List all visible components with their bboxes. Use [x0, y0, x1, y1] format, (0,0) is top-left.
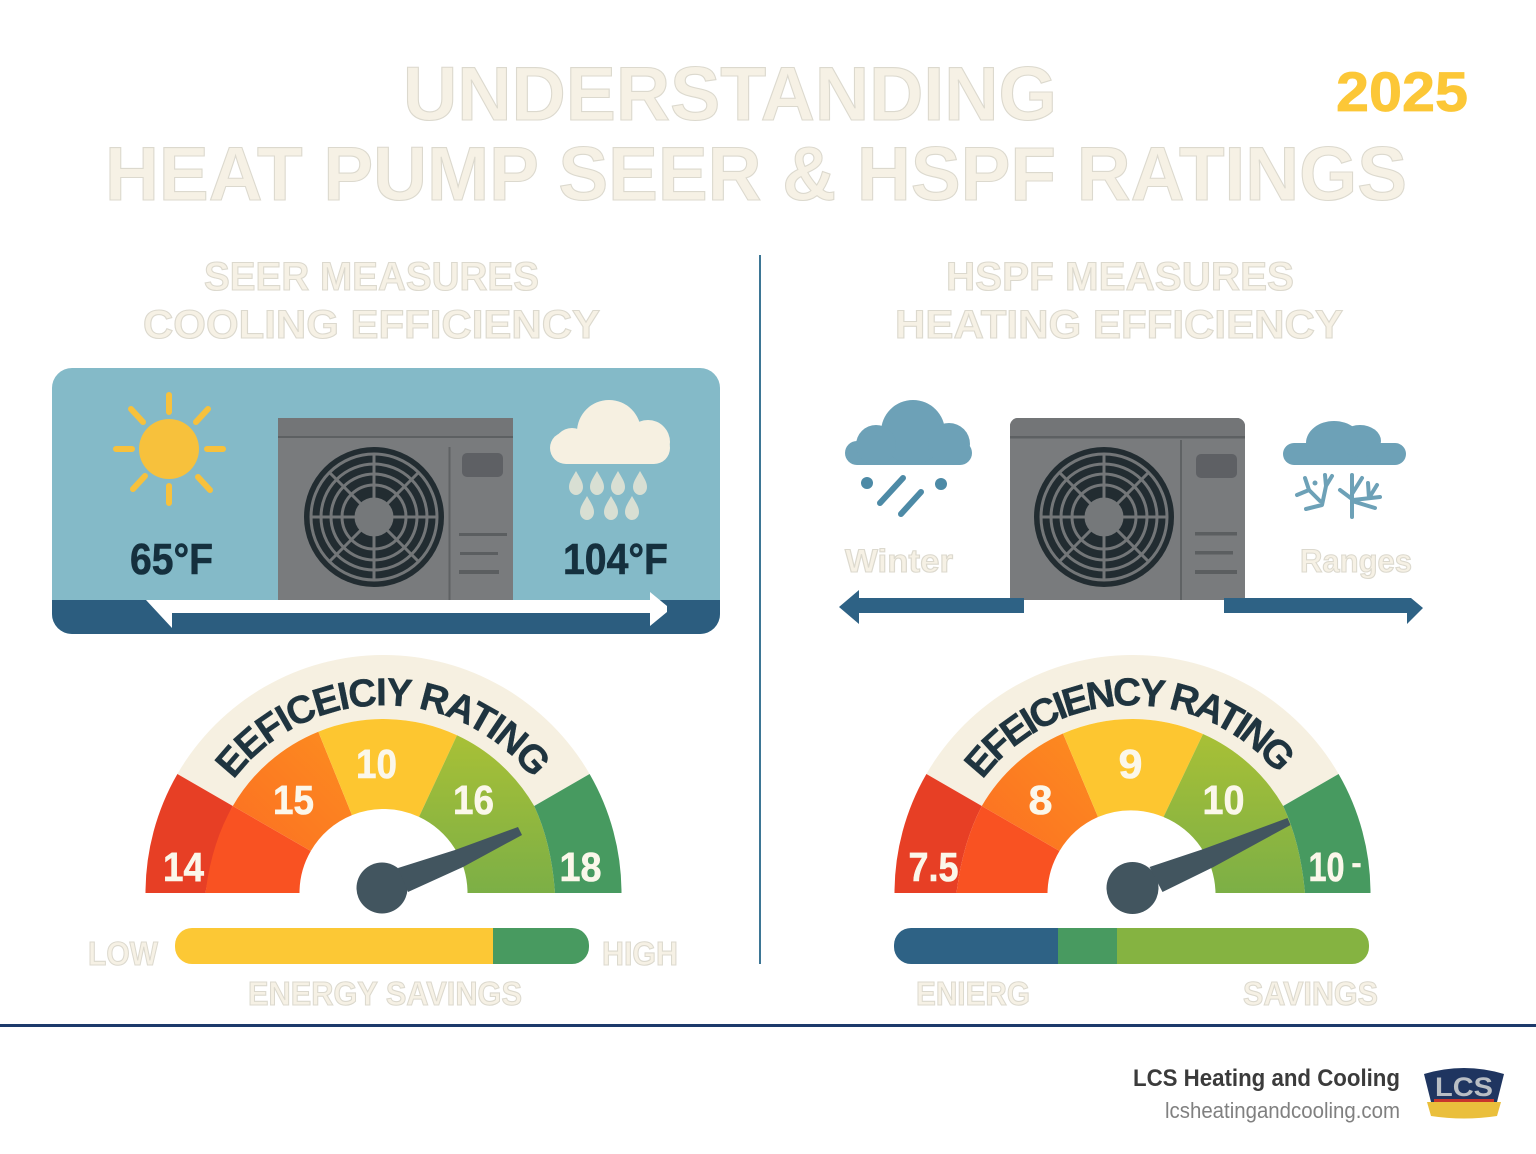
title — [105, 52, 1407, 217]
heat pump unit: heating — [1010, 418, 1245, 600]
gauge title arc: EEFICEICIY RATING — [214, 678, 548, 778]
arrow: left — [839, 590, 1024, 624]
gauge values: - — [1352, 847, 1362, 880]
gauge values: 14 — [163, 844, 204, 890]
heading: HSPF: HSPF MEASURES — [946, 255, 1294, 299]
label: savings: SAVINGS — [1243, 975, 1378, 1012]
footer company text — [1133, 1065, 1400, 1123]
label: enierg: ENIERG — [916, 975, 1030, 1012]
label: 65°F: 65°F — [130, 535, 213, 584]
gauge values: 9 — [1118, 741, 1142, 787]
heading: SEER — [143, 255, 600, 347]
gauge values — [163, 741, 602, 890]
logo: LCS badge — [1424, 1068, 1504, 1118]
label: energy savings: ENERGY SAVINGS — [248, 975, 522, 1012]
arrow: right — [1224, 598, 1423, 624]
center divider — [759, 255, 761, 964]
gauge values — [908, 741, 1362, 890]
gauge values: 16 — [453, 777, 494, 823]
footer rule — [0, 1024, 1536, 1027]
label: low: LOW — [88, 935, 159, 972]
heading: SEER: SEER MEASURES — [204, 255, 539, 299]
energy savings bar: SEER — [88, 928, 678, 1012]
icon: blue rain cloud — [845, 400, 972, 514]
panel: cooling temperature range — [52, 368, 720, 634]
gauge values: 8 — [1028, 777, 1052, 823]
energy savings bar: HSPF — [894, 928, 1378, 1012]
gauge values: 10 — [356, 741, 397, 787]
icon: sun — [116, 395, 223, 503]
title: UNDERSTANDING — [403, 52, 1057, 137]
title: HEAT PUMP SEER & HSPF RATINGS — [105, 132, 1407, 217]
heading: HSPF — [895, 255, 1343, 347]
label: high: HIGH — [602, 935, 678, 972]
arrow: temperature range — [146, 592, 667, 628]
label: ranges: Ranges — [1300, 543, 1412, 579]
gauge: SEER efficiency rating — [146, 655, 622, 914]
panel: heating temperature range — [839, 400, 1423, 624]
icon: cream rain cloud — [550, 400, 670, 520]
heat pump unit: cooling — [278, 418, 513, 600]
label: 104°F: 104°F — [563, 535, 668, 584]
icon: blue snow cloud — [1283, 421, 1406, 517]
footer company text: LCS Heating and Cooling — [1133, 1065, 1400, 1092]
gauge values: 7.5 — [908, 844, 958, 890]
gauge needle — [356, 827, 522, 914]
year badge: 2025 — [1336, 60, 1468, 123]
gauge values: 15 — [273, 777, 314, 823]
label: winter: Winter — [845, 543, 953, 579]
gauge: HSPF efficiency rating — [894, 655, 1370, 914]
gauge values: 10 — [1308, 844, 1344, 890]
heading: SEER: COOLING EFFICIENCY — [143, 303, 600, 347]
gauge values: 18 — [560, 844, 602, 890]
gauge values: 10 — [1202, 777, 1244, 823]
gauge needle — [1106, 818, 1290, 914]
footer company text: lcsheatingandcooling.com — [1165, 1098, 1400, 1123]
logo: LCS badge: LCS — [1435, 1072, 1493, 1102]
heading: HSPF: HEATING EFFICIENCY — [895, 303, 1343, 347]
gauge title arc: EFEICIENCY RATING — [963, 678, 1292, 778]
